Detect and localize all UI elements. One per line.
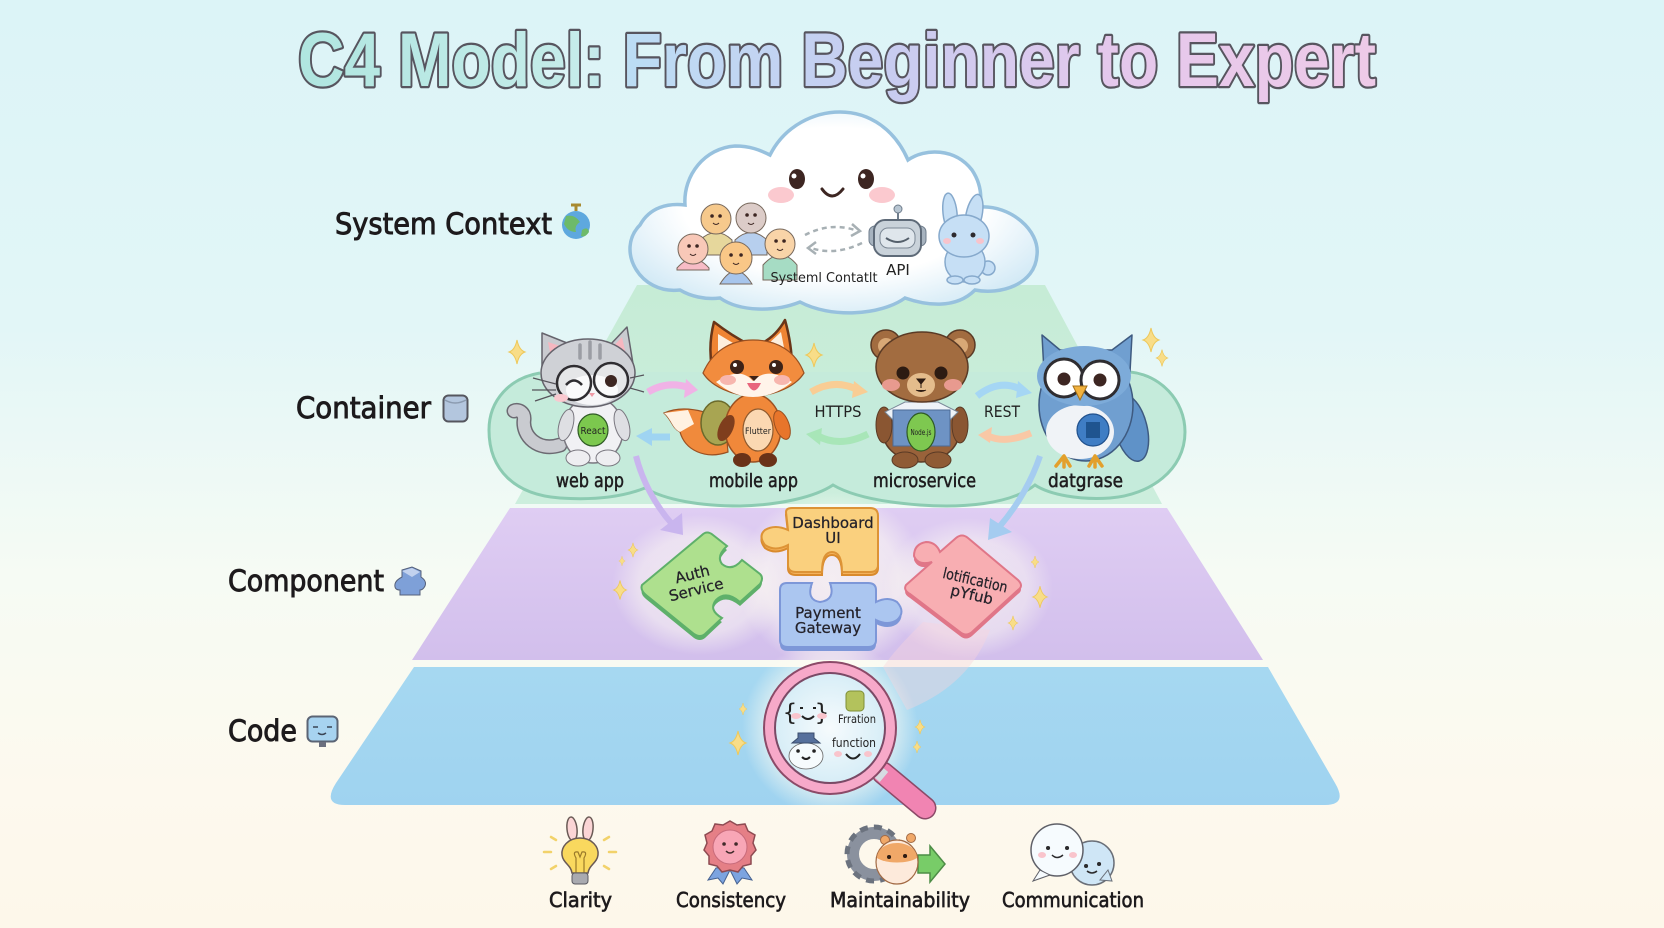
value: Clarity	[544, 817, 616, 912]
label: Consistency: Consistency	[676, 888, 786, 912]
puzzle text: Dashboard	[792, 514, 874, 532]
fox: mobile app	[664, 320, 804, 467]
people group	[677, 203, 797, 284]
owl: database	[1037, 335, 1155, 467]
glow: puzzles left	[612, 515, 788, 655]
cloud outline	[489, 372, 1185, 506]
puzzle text: Payment	[795, 604, 861, 622]
label: web app: web app	[556, 470, 624, 492]
cloud shape	[630, 112, 1037, 313]
label: mobile app: mobile app	[709, 470, 798, 492]
arrow: blue right	[977, 381, 1032, 398]
icon: component block	[395, 567, 426, 595]
label: system context: Systeml Contatlt	[770, 270, 878, 286]
badge: Flutter: Flutter	[745, 427, 771, 437]
bear: microservice	[871, 330, 975, 468]
label: microservice: microservice	[873, 470, 976, 492]
puzzle text	[938, 564, 1009, 611]
panel: container cloud	[489, 320, 1185, 506]
label: REST: REST	[984, 402, 1020, 421]
beam from notification to magnifier	[883, 622, 990, 710]
panel: system context cloud	[630, 112, 1037, 313]
sparkles around components	[614, 543, 1047, 755]
value: Maintainability	[830, 827, 970, 912]
puzzle: Auth Service	[642, 532, 762, 640]
label: API: API	[886, 261, 910, 279]
puzzle text: pYfub	[949, 581, 995, 608]
cat: web app	[514, 327, 644, 466]
lens contents	[783, 691, 876, 769]
icon: code screen	[308, 716, 338, 747]
icon: rosette	[704, 821, 756, 884]
level label: Code	[228, 714, 338, 748]
dashed arrows	[805, 224, 862, 254]
cloud fill	[489, 372, 1185, 506]
fox head	[703, 340, 804, 396]
pyramid layer: code	[331, 667, 1340, 805]
glow: puzzles right	[883, 518, 1053, 658]
level label: Component: Component	[228, 564, 384, 598]
handle	[871, 766, 925, 808]
pyramid layer: component	[412, 508, 1263, 660]
fox ears	[710, 320, 792, 368]
arrow: blue to notification	[988, 456, 1040, 540]
lens	[764, 662, 896, 794]
arrow: green	[806, 428, 868, 445]
badge: React: React	[580, 426, 606, 437]
puzzle text	[795, 604, 861, 637]
value: Consistency	[676, 821, 786, 912]
icon: bunny bulb	[544, 817, 616, 884]
puzzle text	[792, 514, 874, 547]
badge: Node.js: Node.js	[910, 428, 932, 437]
label: database: datgrase	[1048, 470, 1123, 492]
pyramid	[331, 285, 1340, 816]
arrow: pink	[648, 379, 698, 398]
icon: gear hamster arrow	[847, 827, 945, 884]
puzzle: Payment Gateway	[780, 583, 902, 651]
puzzle text	[663, 559, 725, 605]
icon: speech bubbles	[1031, 824, 1114, 885]
arrow: peach	[978, 427, 1031, 443]
puzzle: Notification PubSub	[905, 536, 1021, 638]
icon: globe	[562, 205, 590, 239]
glow: puzzles center	[737, 492, 927, 668]
sparkles	[509, 328, 1168, 367]
puzzle text: lotification	[941, 564, 1009, 596]
arrow: orange	[811, 381, 868, 398]
puzzle text: Gateway	[795, 619, 861, 637]
puzzle text: Service	[667, 574, 725, 605]
puzzle text: UI	[825, 529, 841, 547]
arrow: blue left	[636, 428, 670, 446]
icon: cylinder	[444, 396, 468, 422]
arrow: purple to auth service	[636, 456, 683, 535]
label: Communication: Communication	[1002, 888, 1144, 912]
title: C4 Model: From Beginner to Expert	[298, 18, 1376, 103]
lens contents: Frration	[838, 712, 876, 726]
bunny	[939, 192, 995, 284]
lens contents: {	[783, 700, 797, 726]
robot API	[869, 205, 926, 256]
lens contents: }	[815, 700, 829, 726]
label: HTTPS: HTTPS	[814, 402, 862, 421]
level label: Container: Container	[296, 391, 431, 425]
value: Communication	[1002, 824, 1144, 912]
cloud face	[768, 169, 895, 203]
badge: Flutter	[743, 409, 773, 451]
pyramid layer: container base	[515, 285, 1162, 504]
puzzle text: Auth	[673, 561, 712, 587]
glow: magnifier	[742, 640, 918, 816]
badge: database	[1077, 414, 1109, 446]
label: Clarity: Clarity	[549, 888, 612, 912]
magnifying glass	[764, 662, 925, 808]
puzzle: Dashboard UI	[762, 508, 878, 575]
label: Maintainability: Maintainability	[830, 888, 970, 912]
level label: Code: Code	[228, 714, 297, 748]
level label: System Context: System Context	[335, 207, 552, 241]
lens contents: function	[832, 735, 876, 750]
